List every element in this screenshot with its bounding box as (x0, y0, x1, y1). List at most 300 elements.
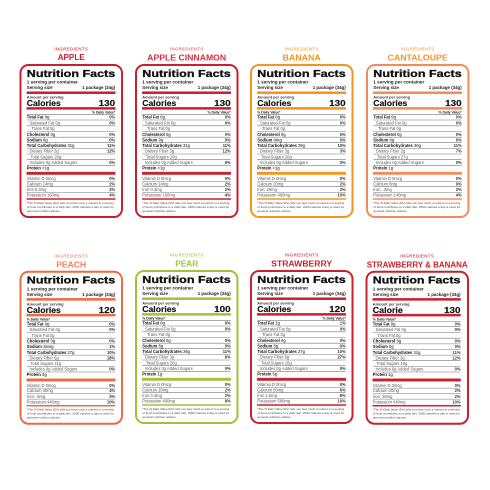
serving info: 1 package (34g) (429, 85, 462, 90)
serving info: Serving size (373, 85, 399, 90)
nutrient rows: 9% (225, 355, 231, 360)
nutrient rows: 11% (223, 143, 231, 148)
vitamins and minerals: 0% (225, 382, 231, 387)
nutrient rows: Sodium 15mg (27, 344, 54, 349)
nutrient rows: Trans Fat 0g (147, 126, 171, 131)
nutrient rows: 0% (225, 120, 231, 126)
footnote (373, 408, 460, 420)
nutrient rows: Total Carbohydrates 27g (27, 350, 75, 355)
calories: Calories (27, 99, 61, 108)
nutrient rows: Saturated Fat 0g (145, 120, 176, 126)
nutrient rows: Cholesterol 0g (27, 132, 56, 137)
nutrient rows: Cholesterol 0g (142, 338, 171, 343)
nutrient rows: Total Sugars 20g (146, 360, 177, 365)
serving info: 1 package (34g) (82, 85, 116, 90)
nutrient rows: Saturated Fat 0g (260, 326, 291, 332)
vitamins and minerals: Iron 0.3mg (142, 393, 163, 398)
nutrient rows: Total Sugars 15g (261, 360, 292, 365)
nutrient rows: Trans Fat 0g (32, 126, 55, 131)
calories: Calories (257, 99, 292, 108)
calories: Amount per serving (257, 301, 295, 306)
nutrient rows: 12% (107, 149, 116, 154)
nutrient rows: Sodium 0g (27, 137, 48, 142)
vitamins and minerals: 0% (340, 176, 346, 181)
nutrient rows: 0% (456, 160, 462, 165)
nutrient rows: Cholesterol 0g (142, 132, 171, 137)
calories (142, 95, 231, 108)
calories: 100 (214, 305, 231, 314)
heading: Nutrition Facts (27, 69, 115, 80)
nutrient rows: 0% (109, 327, 116, 332)
nutrient rows (373, 115, 462, 170)
nutrition card border (251, 271, 352, 423)
ingredients label: INGREDIENTS (54, 47, 88, 52)
nutrient rows: 11% (223, 349, 231, 354)
nutrient rows: Dietary Fiber 3g (376, 355, 405, 360)
serving info (142, 286, 231, 296)
nutrient rows: Saturated Fat 0g (260, 120, 291, 126)
serving info (142, 80, 231, 90)
vitamins and minerals: Calcium 20mg (257, 181, 284, 186)
nutrient rows: Total Sugars 19g (376, 361, 408, 366)
vitamins and minerals: Calcium 40mg (27, 388, 54, 393)
nutrient rows: Total Sugars 20g (30, 154, 62, 159)
vitamins and minerals: Potassium 580mg (257, 399, 291, 404)
ingredients label: INGREDIENTS (401, 47, 435, 52)
nutrient rows: Includes 0g Added Sugars (145, 366, 193, 371)
calories (373, 301, 461, 315)
nutrient rows: 1% (109, 344, 116, 349)
footnote: *The % Daily Value (DV) tells you how much a nutrient in a serving (373, 201, 461, 205)
footnote: general nutrition advice. (373, 209, 408, 213)
vitamins and minerals: Calcium 80mg (257, 387, 284, 392)
calories: Calories (373, 99, 408, 108)
serving info: 1 serving per container (257, 80, 309, 85)
calories: 130 (214, 99, 231, 108)
vitamins and minerals: Potassium 140mg (373, 193, 407, 198)
nutrient rows: 0% (109, 160, 116, 165)
vitamins and minerals: Vitamin D 0mcg (373, 383, 402, 388)
product name: STRAWBERRY (271, 259, 332, 269)
ingredients label: INGREDIENTS (285, 253, 319, 258)
serving info (257, 286, 346, 296)
vitamins and minerals (257, 176, 346, 198)
serving info: Serving size (373, 292, 399, 297)
vitamins and minerals: 4% (456, 193, 462, 198)
calories: 120 (329, 305, 346, 314)
nutrient rows (142, 321, 231, 376)
nutrient rows: Total Fat 0g (373, 321, 396, 326)
nutrient rows: 0% (225, 160, 231, 165)
calories: Calories (142, 99, 177, 108)
vitamins and minerals: 2% (455, 388, 461, 393)
daily value header: % Daily Value* (208, 111, 231, 115)
nutrient rows: Includes 0g Added Sugars (30, 160, 77, 165)
nutrient rows: Sodium 0g (373, 344, 394, 349)
vitamins and minerals: Calcium 20mg (142, 387, 169, 392)
nutrient rows: Total Fat 0g (142, 321, 165, 326)
nutrient rows: 0% (340, 160, 346, 165)
calories: Calories (142, 305, 177, 314)
vitamins and minerals: 3% (109, 394, 116, 399)
vitamins and minerals: Potassium 160mg (27, 193, 60, 198)
footnote: of food contributes to a daily diet. 2000 calories a day is used for (257, 205, 344, 209)
nutrient rows: Protein <1g (142, 165, 165, 170)
serving info: 1 package (34g) (313, 85, 346, 90)
nutrient rows: Total Carbohydrates 29g (257, 143, 306, 148)
vitamins and minerals (27, 176, 116, 198)
vitamins and minerals: 2% (109, 187, 116, 192)
serving info (27, 286, 116, 297)
nutrient rows (27, 115, 116, 170)
nutrient rows (257, 321, 346, 376)
nutrition card border (367, 65, 468, 217)
vitamins and minerals: Iron 1.5mg (257, 393, 278, 398)
nutrient rows: Includes 0g Added Sugars (260, 160, 308, 165)
nutrient rows: 0% (340, 343, 346, 348)
nutrient rows (257, 115, 346, 170)
panel: peach (20, 253, 122, 424)
ingredients label: INGREDIENTS (285, 47, 319, 52)
serving info: 1 package (34g) (198, 85, 231, 90)
vitamins and minerals: 6% (340, 387, 346, 392)
nutrition card border (251, 65, 352, 217)
nutrient rows: Sodium 0mg (257, 137, 282, 142)
serving info: Serving size (257, 291, 283, 296)
calories: Amount per serving (27, 95, 64, 100)
product name: STRAWBERRY & BANANA (367, 259, 468, 269)
nutrient rows: Total Fat 0g (257, 115, 280, 120)
calories: Calories (257, 305, 292, 314)
serving info: 1 package (34g) (198, 291, 231, 296)
nutrient rows: Total Fat 1g (257, 321, 280, 326)
nutrient rows: Includes 0g Added Sugars (376, 160, 424, 165)
vitamins and minerals: Iron: .3mg (373, 187, 392, 192)
vitamins and minerals: Vitamin D 0mcg (257, 176, 287, 181)
vitamins and minerals: Potassium 400mg (142, 399, 176, 404)
vitamins and minerals: 0% (456, 181, 462, 186)
footnote: of food contributes to a daily diet. 2000 calories a day is used for (373, 412, 460, 416)
nutrient rows (373, 321, 461, 377)
nutrient rows: Total Sugars 21g (30, 361, 62, 366)
nutrient rows: Cholesterol 0g (257, 338, 286, 343)
nutrient rows: Saturated Fat 0g (30, 327, 61, 332)
vitamins and minerals: Vitamin D 0mcg (142, 382, 172, 387)
vitamins and minerals: Vitamin D 0mcg (373, 176, 403, 181)
footnote (27, 201, 114, 213)
nutrient rows: 0% (225, 343, 231, 348)
vitamins and minerals: Vitamin D 0mcg (257, 382, 287, 387)
nutrient rows: 0% (225, 366, 231, 371)
nutrient rows: Cholesterol 0g (373, 132, 402, 137)
serving info: Serving size (142, 85, 168, 90)
footnote: general nutrition advice. (142, 209, 177, 213)
vitamins and minerals: Calcium 8mg (373, 181, 398, 186)
vitamins and minerals: Iron: 26mg (373, 394, 393, 399)
ingredients label: INGREDIENTS (54, 253, 88, 258)
serving info: 1 serving per container (142, 286, 194, 291)
vitamins and minerals: 4% (109, 388, 116, 393)
serving info: 1 serving per container (257, 286, 309, 291)
nutrient rows: Protein 1g (142, 371, 163, 376)
nutrition card border (20, 272, 122, 424)
footnote: *The % Daily Value (DV) tells you how much a nutrient in a serving (257, 407, 345, 411)
nutrient rows: Protein 3g (27, 372, 47, 377)
vitamins and minerals: 2% (340, 181, 346, 186)
ingredients label: INGREDIENTS (170, 253, 204, 258)
calories: Amount per serving (27, 301, 64, 306)
nutrient rows: Sodium 5g (142, 343, 164, 348)
vitamins and minerals (142, 176, 231, 198)
vitamins and minerals: 10% (107, 399, 116, 404)
footnote: *The % Daily Value (DV) tells you how much a nutrient in a serving (142, 407, 230, 411)
nutrient rows: Protein <1g (257, 165, 280, 170)
calories: 130 (329, 99, 346, 108)
serving info: Serving size (142, 291, 168, 296)
daily value header: % Daily Value* (439, 111, 462, 115)
serving info: 1 package (34g) (428, 292, 461, 297)
calories: 130 (99, 99, 116, 108)
panel: banana (251, 47, 352, 217)
nutrient rows: 11% (107, 143, 116, 148)
footnote: of food contributes to a daily diet. 2000 calories a day is used for (257, 411, 344, 415)
calories: 120 (99, 306, 116, 315)
nutrient rows: 18% (107, 355, 116, 360)
nutrition card border (136, 65, 238, 217)
nutrient rows: Cholesterol 0g (27, 339, 56, 344)
footnote: general nutrition advice. (373, 416, 407, 420)
calories: Amount per serving (142, 95, 180, 100)
nutrient rows: Total Sugars 20g (146, 154, 177, 159)
vitamins and minerals: Vitamin D 0mcg (27, 176, 56, 181)
footnote: general nutrition advice. (257, 415, 292, 419)
nutrient rows: 7% (456, 149, 462, 154)
daily value header: % Daily Value* (142, 317, 166, 321)
calories (257, 301, 346, 314)
panel: apple cinnamon (136, 47, 238, 217)
footnote: general nutrition advice. (257, 209, 292, 213)
nutrient rows: 0% (340, 120, 346, 126)
serving info: 1 serving per container (373, 80, 425, 85)
footnote (142, 407, 230, 419)
nutrient rows: 0% (109, 137, 116, 142)
nutrient rows: 0% (225, 338, 231, 343)
daily value header: % Daily Value* (373, 317, 397, 321)
nutrient rows: 0% (225, 115, 231, 120)
vitamins and minerals (373, 383, 461, 404)
vitamins and minerals: 2% (225, 387, 231, 392)
nutrient rows: 0% (225, 326, 231, 332)
vitamins and minerals: 2% (109, 181, 116, 186)
vitamins and minerals: 0% (455, 383, 461, 388)
vitamins and minerals: Potassium 440mg (373, 399, 406, 404)
nutrient rows: Includes 0g Added Sugars (30, 367, 77, 372)
nutrient rows: 10% (337, 349, 346, 354)
calories: Amount per serving (373, 301, 410, 306)
nutrient rows: 0% (455, 321, 461, 326)
daily value header: % Daily Value* (257, 111, 281, 115)
vitamins and minerals: 2% (225, 181, 231, 186)
vitamins and minerals: 10% (337, 193, 346, 198)
calories: 130 (445, 99, 462, 108)
vitamins and minerals: Iron 0.3mg (142, 187, 163, 192)
serving info: 1 package (34g) (313, 291, 346, 296)
nutrient rows: Total Carbohydrates 31g (27, 143, 75, 148)
nutrient rows: 0% (456, 132, 462, 137)
nutrient rows: Total Fat 0g (373, 115, 396, 120)
heading: Nutrition Facts (257, 275, 346, 286)
vitamins and minerals: Potassium 160mg (142, 193, 176, 198)
heading: Nutrition Facts (257, 69, 346, 80)
nutrient rows: 0% (455, 339, 461, 344)
nutrient rows: Trans Fat 0g (262, 332, 286, 337)
nutrient rows: Dietary Fiber 3g (145, 355, 175, 360)
nutrient rows: 0% (109, 120, 116, 126)
serving info (257, 80, 346, 90)
nutrient rows: Total Sugars 27g (377, 154, 408, 159)
nutrient rows: Protein 1g (373, 372, 393, 377)
heading: Nutrition Facts (142, 275, 231, 286)
nutrient rows: 0% (340, 115, 346, 120)
nutrient rows: 0% (340, 137, 346, 142)
nutrient rows: 0% (340, 338, 346, 343)
nutrition card border (136, 271, 238, 423)
nutrient rows: Includes 0g Added Sugars (260, 366, 308, 371)
nutrient rows: Cholesterol 0g (373, 339, 402, 344)
nutrient rows: Trans Fat 0g (378, 333, 401, 338)
vitamins and minerals (373, 176, 462, 198)
nutrient rows: Trans Fat 0g (378, 126, 402, 131)
calories: Amount per serving (373, 95, 411, 100)
nutrient rows: 0% (340, 132, 346, 137)
nutrient rows: 27% (337, 355, 346, 360)
nutrient rows: Dietary Fiber 3g (30, 149, 59, 154)
nutrient rows: 0% (340, 326, 346, 332)
vitamins and minerals: 2% (225, 187, 231, 192)
vitamins and minerals: 0% (109, 176, 116, 181)
nutrient rows: Includes 0g Added Sugars (376, 367, 423, 372)
product name: BANANA (283, 53, 321, 63)
footnote (257, 201, 345, 213)
nutrient rows: Trans Fat 0g (32, 333, 55, 338)
daily value header: % Daily Value* (323, 317, 346, 321)
vitamins and minerals: Iron 0.3mg (27, 187, 47, 192)
calories (257, 95, 346, 108)
serving info: Serving size (27, 85, 53, 90)
serving info: 1 serving per container (373, 286, 424, 291)
calories: Amount per serving (142, 301, 180, 306)
nutrient rows: Dietary Fiber 8g (260, 355, 290, 360)
vitamins and minerals: Iron: 26mg (257, 187, 278, 192)
nutrient rows: Dietary Fiber 3g (145, 149, 175, 154)
panel: strawberry (251, 253, 352, 423)
nutrient rows: 0% (455, 367, 461, 372)
nutrient rows: 0% (456, 137, 462, 142)
footnote: general nutrition advice. (142, 415, 177, 419)
vitamins and minerals: Calcium 20mg (373, 388, 400, 393)
footnote: of food contributes to a daily diet. 2000 calories a day is used for (27, 412, 114, 416)
nutrient rows: 0% (225, 137, 231, 142)
footnote: *The % Daily Value (DV) tells you how much a nutrient in a serving (257, 201, 345, 205)
footnote: of food contributes to a daily diet. 2000 calories a day is used for (142, 411, 229, 415)
nutrient rows: 11% (454, 143, 462, 148)
nutrient rows: Dietary Fiber 5g (30, 355, 59, 360)
serving info: 1 serving per container (142, 80, 194, 85)
heading: Nutrition Facts (142, 69, 231, 80)
panel: apple (20, 47, 122, 217)
nutrient rows: 0% (340, 366, 346, 371)
footnote: of food contributes to a daily diet. 2000 calories a day is used for (142, 205, 229, 209)
vitamins and minerals: 4% (225, 193, 231, 198)
vitamins and minerals: 8% (340, 393, 346, 398)
vitamins and minerals: Calcium 14mg (27, 181, 54, 186)
calories: Calorie (373, 306, 403, 315)
vitamins and minerals: Iron: .5mg (27, 394, 46, 399)
serving info: 1 package (34g) (82, 292, 116, 297)
nutrition card border (20, 65, 122, 217)
vitamins and minerals: Calcium 14mg (142, 181, 169, 186)
product name: APPLE CINNAMON (147, 53, 226, 63)
nutrient rows: Total Sugars 20g (261, 154, 292, 159)
nutrient rows: Sodium 0g (142, 137, 164, 142)
nutrient rows: 0% (456, 120, 462, 126)
nutrient rows: Total Fat 0g (27, 321, 50, 326)
nutrient rows: 11% (453, 350, 461, 355)
vitamins and minerals: 0% (456, 176, 462, 181)
footnote: of food contributes to a daily diet. 2000 calories a day is used for (27, 205, 114, 209)
nutrient rows: Total Carbohydrates 27g (257, 349, 306, 354)
calories (373, 95, 462, 108)
nutrition card border (366, 272, 468, 424)
nutrient rows: Dietary Fiber 2g (376, 149, 406, 154)
vitamins and minerals: Potassium 460mg (257, 193, 291, 198)
nutrient rows: Trans Fat 0g (262, 126, 286, 131)
nutrient rows: 0% (455, 344, 461, 349)
daily value header: % Daily Value* (27, 317, 51, 321)
footnote (257, 407, 345, 419)
serving info: Serving size (27, 292, 53, 297)
vitamins and minerals (27, 383, 116, 404)
nutrient rows: Protein 5g (257, 371, 278, 376)
calories (27, 301, 116, 315)
product name: CANTALOUPE (388, 53, 448, 63)
nutrient rows: 12% (222, 149, 231, 154)
nutrient rows: 0% (225, 132, 231, 137)
nutrient rows: 0% (456, 115, 462, 120)
vitamins and minerals: 10% (337, 399, 346, 404)
nutrient rows: Sodium 5g (257, 343, 279, 348)
vitamins and minerals: 0% (109, 383, 116, 388)
product name: PEAR (175, 259, 199, 269)
footnote: of food contributes to a daily diet. 2000 calories a day is used for (373, 205, 460, 209)
daily value header: % Daily Value* (92, 111, 116, 115)
panel: cantaloupe (367, 47, 468, 217)
calories: Calories (27, 306, 61, 315)
vitamins and minerals: Vitamin D 0mcg (27, 383, 56, 388)
footnote: *The % Daily Value (DV) tells you how much a nutrient in a serving (27, 201, 114, 205)
vitamins and minerals (257, 382, 346, 404)
nutrient rows: 3% (340, 149, 346, 154)
vitamins and minerals: 0% (340, 382, 346, 387)
nutrient rows: 0% (109, 115, 116, 120)
nutrient rows: Trans Fat 0g (147, 332, 171, 337)
nutrient rows: Protein <1g (27, 165, 50, 170)
ingredients label: INGREDIENTS (400, 253, 434, 258)
nutrient rows: Saturated Fat 0g (376, 327, 407, 332)
footnote: general nutrition advice. (27, 209, 61, 213)
vitamins and minerals: 9% (225, 399, 231, 404)
product name: PEACH (56, 259, 86, 269)
